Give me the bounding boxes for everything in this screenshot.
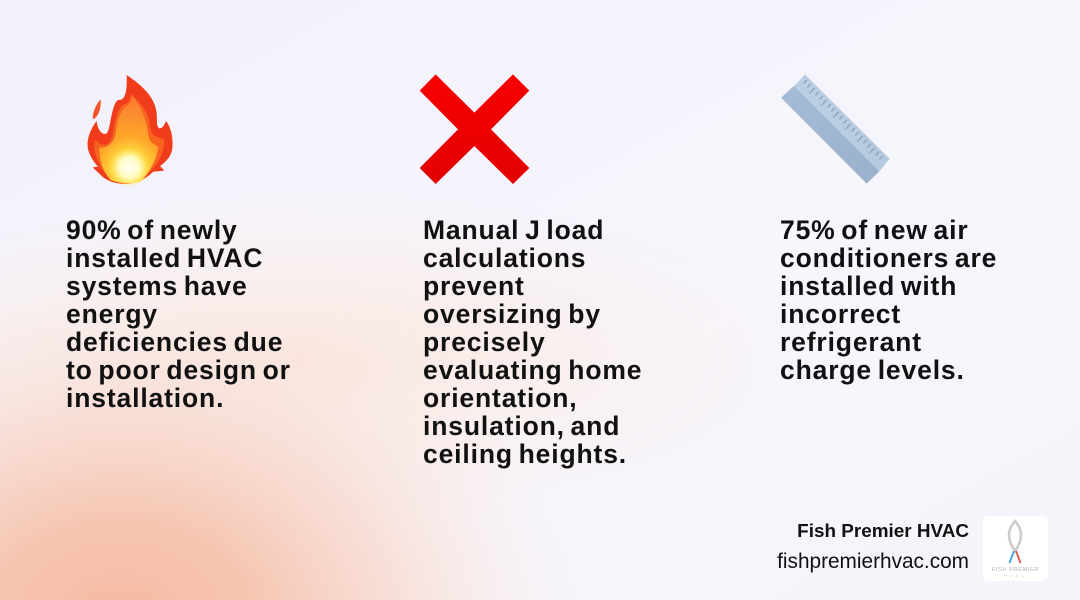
icon: red cross mark — [420, 74, 530, 184]
icon: fire — [88, 75, 173, 186]
icon: fish logo — [992, 519, 1039, 578]
text: Manual J load calculations: prevent — [423, 270, 525, 300]
text: stat on design deficiencies: installation. — [66, 382, 224, 412]
website: fishpremierhvac.com — [777, 550, 969, 573]
text: stat on design deficiencies: deficiencies due — [66, 326, 283, 356]
text: Manual J load calculations: Manual J load — [423, 214, 604, 244]
icon: fish logo: FISH PREMIER — [992, 567, 1039, 573]
text: Manual J load calculations: insulation, and — [423, 410, 620, 440]
logo card — [983, 516, 1048, 581]
icon: fish logo: HVAC — [1004, 573, 1027, 578]
text: Manual J load calculations: precisely — [423, 326, 546, 356]
text: Manual J load calculations: oversizing by — [423, 298, 601, 328]
text: stat on design deficiencies: to poor design or — [66, 354, 291, 384]
text: refrigerant charge stat: conditioners are — [780, 242, 997, 272]
text: Manual J load calculations: orientation, — [423, 382, 577, 412]
text: refrigerant charge stat: incorrect — [780, 298, 901, 328]
text: stat on design deficiencies: 90% of newly — [66, 214, 238, 244]
text: stat on design deficiencies — [66, 214, 291, 412]
text: stat on design deficiencies: systems have — [66, 270, 248, 300]
text: refrigerant charge stat: charge levels. — [780, 354, 965, 384]
text: refrigerant charge stat: refrigerant — [780, 326, 922, 356]
text: Manual J load calculations: calculations — [423, 242, 586, 272]
brand name: Fish Premier HVAC — [797, 521, 969, 542]
icon: ruler — [781, 74, 890, 184]
text: refrigerant charge stat — [780, 214, 997, 384]
text: refrigerant charge stat: 75% of new air — [780, 214, 968, 244]
text: refrigerant charge stat: installed with — [780, 270, 957, 300]
text: stat on design deficiencies: energy — [66, 298, 158, 328]
text: Manual J load calculations: evaluating home — [423, 354, 642, 384]
text: Manual J load calculations: ceiling heights. — [423, 438, 627, 468]
text: stat on design deficiencies: installed HVAC — [66, 242, 263, 272]
text: Manual J load calculations — [423, 214, 642, 468]
